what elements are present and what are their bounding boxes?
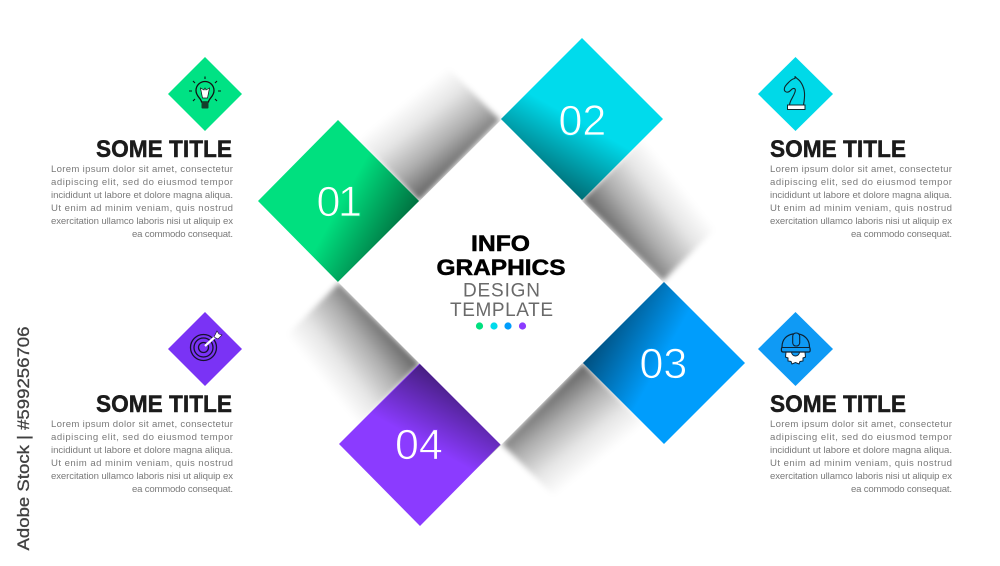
text block: Ut enim ad minim veniam, quis nostrud bbox=[51, 458, 233, 469]
text block: Lorem ipsum dolor sit amet, consectetur bbox=[770, 164, 953, 175]
text block bbox=[51, 419, 234, 495]
panel: centre white diamond bbox=[338, 120, 663, 445]
text block: incididunt ut labore et dolore magna aliqua. bbox=[51, 445, 233, 456]
text block: adipiscing elit, sed do eiusmod tempor bbox=[51, 432, 234, 443]
panel: numbered diamond 04 bbox=[339, 363, 501, 526]
text block: ea commodo consequat. bbox=[851, 229, 952, 240]
text block: Lorem ipsum dolor sit amet, consectetur bbox=[51, 164, 234, 175]
text block bbox=[770, 419, 953, 495]
text block: adipiscing elit, sed do eiusmod tempor bbox=[51, 177, 234, 188]
text block: ea commodo consequat. bbox=[132, 229, 233, 240]
heading: info graphics bbox=[436, 231, 566, 280]
text block: incididunt ut labore et dolore magna aliqua. bbox=[51, 190, 233, 201]
text block: Lorem ipsum dolor sit amet, consectetur bbox=[51, 419, 234, 430]
vertical stock id label: Adobe Stock | #599256706 bbox=[14, 326, 33, 550]
text block: Ut enim ad minim veniam, quis nostrud bbox=[770, 458, 952, 469]
text block: Ut enim ad minim veniam, quis nostrud bbox=[770, 203, 952, 214]
text block: incididunt ut labore et dolore magna aliqua. bbox=[770, 190, 952, 201]
text block: exercitation ullamco laboris nisi ut aliquip ex bbox=[770, 216, 952, 227]
panel: numbered diamond 02 bbox=[501, 38, 663, 200]
text block: adipiscing elit, sed do eiusmod tempor bbox=[770, 177, 953, 188]
text block: exercitation ullamco laboris nisi ut aliquip ex bbox=[770, 471, 952, 482]
icon: chess knight in cyan diamond bbox=[758, 57, 833, 131]
text block: adipiscing elit, sed do eiusmod tempor bbox=[770, 432, 953, 443]
title: SOME TITLE bbox=[96, 391, 232, 418]
panel: top right block bbox=[758, 57, 953, 240]
panel: numbered diamond 03: 03 bbox=[640, 340, 687, 388]
title: SOME TITLE bbox=[96, 136, 232, 163]
text block: exercitation ullamco laboris nisi ut aliquip ex bbox=[51, 216, 233, 227]
colour dots bbox=[476, 322, 526, 330]
cast shadows around centre diamond bbox=[279, 60, 723, 504]
panel: numbered diamond 03 bbox=[583, 282, 745, 444]
subheading: design template: TEMPLATE bbox=[450, 300, 553, 321]
text block: ea commodo consequat. bbox=[851, 484, 952, 495]
text block bbox=[51, 164, 234, 240]
text block: incididunt ut labore et dolore magna aliqua. bbox=[770, 445, 952, 456]
icon: light bulb in green diamond bbox=[168, 57, 242, 131]
panel: bottom right block bbox=[758, 312, 953, 495]
text block: Ut enim ad minim veniam, quis nostrud bbox=[51, 203, 233, 214]
panel: numbered diamond 01 bbox=[258, 120, 419, 282]
subheading: design template: DESIGN bbox=[463, 280, 540, 302]
panel: numbered diamond 02: 02 bbox=[558, 97, 606, 145]
panel: numbered diamond 01: 01 bbox=[316, 178, 362, 226]
subheading: design template bbox=[450, 280, 553, 321]
panel: top left block bbox=[51, 57, 242, 240]
title: SOME TITLE bbox=[770, 391, 906, 418]
text block: ea commodo consequat. bbox=[132, 484, 233, 495]
text block bbox=[770, 164, 953, 240]
text block: exercitation ullamco laboris nisi ut aliquip ex bbox=[51, 471, 233, 482]
heading: info graphics: GRAPHICS bbox=[436, 255, 566, 280]
title: SOME TITLE bbox=[770, 136, 906, 163]
panel: bottom left block bbox=[51, 312, 242, 495]
heading: info graphics: INFO bbox=[471, 231, 530, 256]
text block: Lorem ipsum dolor sit amet, consectetur bbox=[770, 419, 953, 430]
icon: dart target in purple diamond bbox=[168, 312, 242, 386]
panel: numbered diamond 04: 04 bbox=[395, 421, 443, 469]
icon: hard hat and gear in blue diamond bbox=[758, 312, 833, 386]
